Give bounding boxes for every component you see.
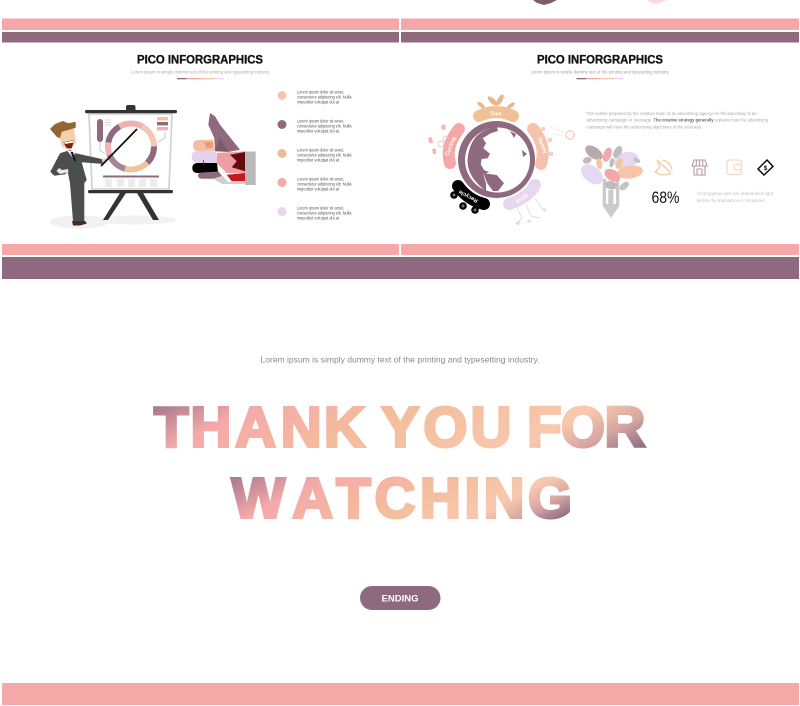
icon: dollar bill: $ [764,166,768,172]
right top banner [401,18,799,42]
legend item 2: imperdiet volutpat dui at [297,128,340,134]
icon: wallet [727,160,742,174]
legend item 4 [278,176,352,192]
top band [2,257,799,279]
wind segment: Wind [514,192,529,204]
left bottom banner [2,244,399,255]
globe eco diagram [428,94,574,226]
left divider [177,78,224,79]
ending subtitle: Lorem ipsum is simply dummy text of the printing and typesetting industry. [260,354,540,364]
businessman [50,121,107,226]
floor shadows [50,216,176,228]
wind segment [509,185,547,226]
presenter illustration [50,105,177,228]
tree segment [476,94,516,118]
campaign description text: The creative strategy generally [654,118,714,122]
tree segment: Tree [490,112,502,118]
legend item 3: Lorem ipsum dolor sit amet, [297,148,344,152]
bottom band [2,683,799,705]
board legend and labels [97,117,168,186]
legend item 2: Lorem ipsum dolor sit amet, [297,118,344,124]
legend item 5 [278,206,352,220]
icon: store [692,160,707,175]
icon: dollar bill [758,160,773,175]
pencil tree illustration [577,142,644,218]
recycle segment: Recycle [458,188,479,203]
thank you headline: WATCHING [232,466,572,530]
stat description: before the transaction is completed. [697,198,766,203]
left subtitle: Lorem ipsum is simply dummy text of the printing and typesetting industry. [131,70,270,74]
right divider [576,78,624,79]
legend item 4: imperdiet volutpat dui at [297,186,340,192]
panel: thank you slide [2,257,799,705]
legend item 1: consectetur adipiscing elit. Nulla [297,94,352,100]
legend item 2 [278,118,352,134]
panel: left slide [2,18,399,255]
pointer stick [101,129,137,166]
campaign description text: advertising campaign or message. [586,118,652,122]
icon: megaphone [655,160,672,175]
legend item 5: consectetur adipiscing elit. Nulla [297,210,352,216]
thank you headline: THANK YOU FOR [154,396,645,458]
legend item 1: imperdiet volutpat dui at [297,100,340,104]
campaign description text: explains how the advertising [714,118,769,122]
campaign description text: campaign will meet the advertising objectives of the business. [586,124,702,130]
cropped shapes from previous slide [533,0,667,5]
ending button: ENDING [382,594,418,604]
recycle segment [450,186,484,214]
stat description: Of shopping carts are abandoned right [697,191,774,196]
right subtitle: Lorem ipsum is simply dummy text of the printing and typesetting industry. [530,70,670,74]
ending button [360,586,440,610]
legend item 4: Lorem ipsum dolor sit amet, [297,176,344,182]
campaign description text: The outline prepared by the creative team of an advertising agency for the launching of an [586,111,757,116]
presentation board [85,105,177,220]
thank you headline [154,396,645,530]
panel: right slide [401,18,799,255]
sunny segment: Sunny [536,137,548,155]
globe [458,121,535,198]
legend item 3: imperdiet volutpat dui at [297,158,340,162]
board donut chart [108,124,154,170]
legend item 2: consectetur adipiscing elit. Nulla [297,124,352,128]
left top banner [2,18,399,42]
legend item 5: Lorem ipsum dolor sit amet, [297,206,344,210]
cycling segment: Cycling [445,136,458,157]
left heading: PICO INFORGRAPHICS [137,52,263,66]
legend item 3 [278,148,352,162]
legend item 4: consectetur adipiscing elit. Nulla [297,182,352,186]
right heading: PICO INFORGRAPHICS [537,52,663,66]
stat: 68%: 68% [652,189,680,207]
sunny segment [533,126,574,164]
legend item 1 [278,90,352,104]
legend item 1: Lorem ipsum dolor sit amet, [297,90,344,94]
cycling segment [428,124,459,163]
right bottom banner [401,244,799,255]
legend item 3: consectetur adipiscing elit. Nulla [297,152,352,158]
legend list [278,90,352,220]
legend item 5: imperdiet volutpat dui at [297,216,340,220]
thumbs-up hand illustration [192,113,256,185]
